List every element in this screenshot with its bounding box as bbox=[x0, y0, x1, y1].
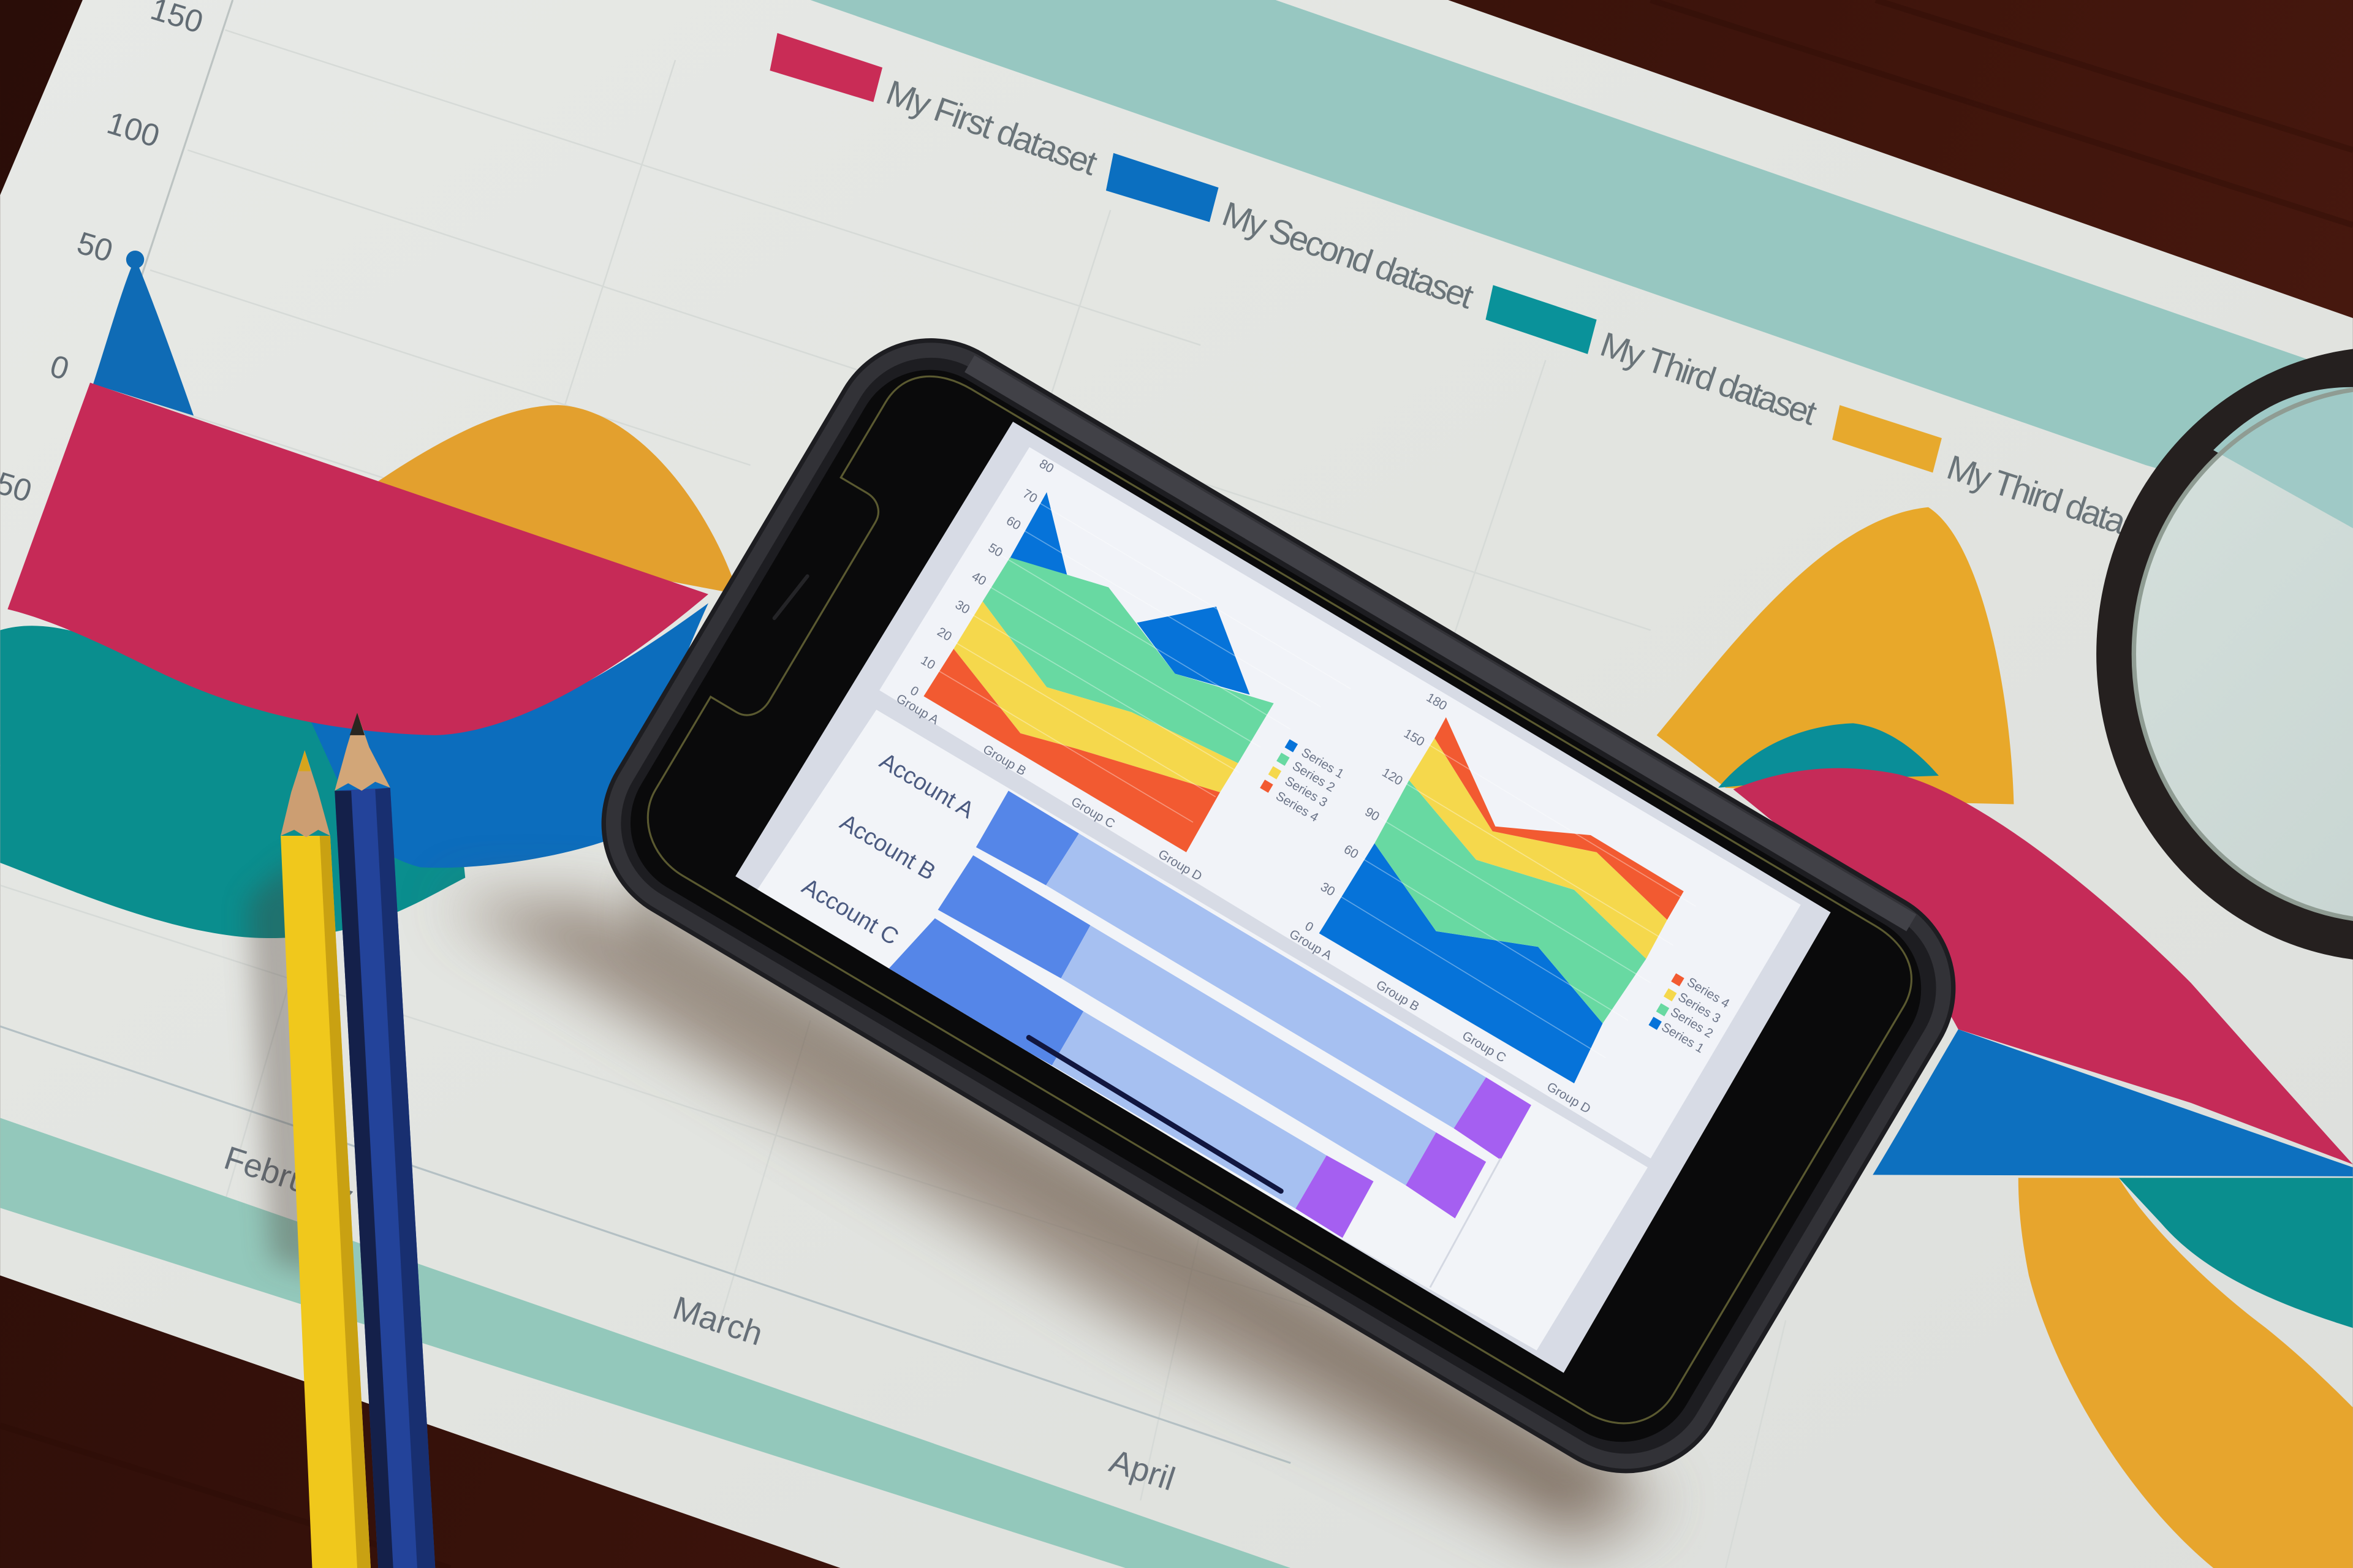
legend: third dataset bbox=[1485, 285, 1822, 433]
chart one: y axis labels: 20 bbox=[934, 624, 954, 644]
magnifier rim bbox=[2096, 347, 2353, 962]
chart one: green area bbox=[983, 558, 1274, 763]
legend: fourth dataset bbox=[1832, 405, 2169, 554]
chart two: x axis labels bbox=[1287, 927, 1593, 1116]
chart one: y axis labels: 60 bbox=[1004, 513, 1023, 533]
right chart: blue area bbox=[1873, 1029, 2353, 1176]
chart two: yellow area bbox=[1409, 738, 1667, 959]
account B bar bbox=[938, 855, 1486, 1218]
chart one: legend: Series 3 bbox=[1283, 774, 1330, 810]
chart one: blue area bbox=[1010, 492, 1250, 695]
account C bar bbox=[885, 918, 1374, 1238]
chart one: x axis labels: Group C bbox=[1069, 795, 1117, 831]
chart two: green area bbox=[1374, 780, 1646, 1023]
lens edge highlight bbox=[2134, 387, 2353, 922]
account labels: Account A bbox=[875, 748, 979, 824]
phone bbox=[564, 300, 1993, 1511]
chart two: y axis labels: 60 bbox=[1341, 842, 1361, 862]
magnifying glass bbox=[2096, 347, 2353, 962]
chart one: y axis labels: 80 bbox=[1037, 456, 1056, 476]
legend: second dataset: My Second dataset bbox=[1218, 194, 1479, 316]
y axis labels: 0 bbox=[46, 347, 74, 387]
x axis line bbox=[0, 1026, 1290, 1463]
yellow pencil bbox=[281, 750, 371, 1568]
account labels: Account B bbox=[836, 809, 940, 885]
chart two: red area bbox=[1434, 718, 1684, 920]
chart two: blue area bbox=[1319, 843, 1602, 1083]
chart two: y axis labels bbox=[1303, 691, 1449, 935]
left chart: red area bbox=[7, 382, 708, 735]
paper grid lines bbox=[0, 30, 1786, 1568]
chart one: legend: Series 1 bbox=[1299, 745, 1346, 781]
y axis labels: 50 bbox=[73, 224, 117, 269]
legend: second dataset bbox=[1106, 153, 1479, 316]
chart one: x axis labels bbox=[894, 691, 1204, 884]
chart one: x axis labels: Group A bbox=[894, 691, 941, 727]
phone contact shadow bbox=[631, 870, 1635, 1508]
chart two: y axis labels: 0 bbox=[1303, 919, 1316, 935]
case rim shading bbox=[580, 317, 1977, 1494]
pencil shadow bbox=[248, 855, 323, 1275]
bottom teal band bbox=[0, 1118, 1290, 1568]
legend: first dataset: My First dataset bbox=[881, 72, 1102, 183]
case top highlight bbox=[969, 364, 1911, 923]
left chart: teal area bbox=[0, 626, 465, 938]
divider line bbox=[1430, 1158, 1501, 1287]
chart two: legend: Series 1 bbox=[1659, 1020, 1707, 1056]
bottom bars panel bbox=[751, 710, 1648, 1350]
month labels bbox=[220, 1140, 1180, 1498]
chart two: grid lines bbox=[1330, 738, 1696, 1058]
y axis line bbox=[142, 0, 234, 276]
chart one: x axis labels: Group B bbox=[980, 742, 1028, 779]
chart two: legend: Series 3 bbox=[1675, 990, 1723, 1026]
legend: first dataset bbox=[770, 33, 1102, 183]
glass front bbox=[603, 342, 1949, 1470]
account labels: Account C bbox=[797, 874, 903, 950]
teal band in lens bbox=[2213, 387, 2353, 528]
y axis labels: 100 bbox=[103, 105, 164, 154]
chart one: y axis labels: 30 bbox=[953, 597, 972, 617]
chart two: x axis labels: Group B bbox=[1374, 978, 1422, 1014]
legend: third dataset: My Third dataset bbox=[1596, 325, 1822, 433]
chart two: y axis labels: 180 bbox=[1424, 691, 1449, 713]
account A bar bbox=[976, 791, 1531, 1160]
right chart: teal lower area bbox=[2119, 1178, 2353, 1328]
chart one: red area bbox=[923, 649, 1220, 852]
right chart: orange lower area bbox=[2018, 1178, 2353, 1568]
right chart: teal hump bbox=[1718, 723, 1939, 788]
chart two: y axis labels: 120 bbox=[1379, 765, 1405, 789]
right chart: orange peak bbox=[1657, 507, 2014, 805]
legend: fourth dataset: My Third dataset bbox=[1942, 447, 2169, 554]
chart one: x axis labels: Group D bbox=[1156, 847, 1204, 884]
chart two: legend bbox=[1648, 973, 1732, 1056]
chart two: x axis labels: Group C bbox=[1460, 1029, 1509, 1066]
chart one: yellow area bbox=[953, 601, 1238, 792]
chart one: y axis labels: 40 bbox=[969, 569, 988, 588]
chart one: y axis labels: 70 bbox=[1020, 487, 1040, 506]
top charts panel bbox=[879, 447, 1801, 1158]
chart one: y axis labels: 10 bbox=[919, 653, 938, 672]
chart two: legend: Series 4 bbox=[1684, 975, 1732, 1011]
chart two: x axis labels: Group D bbox=[1544, 1080, 1593, 1116]
chart two: y axis labels: 150 bbox=[1401, 726, 1427, 749]
chart two: y axis labels: 30 bbox=[1318, 880, 1338, 899]
y axis labels bbox=[0, 0, 207, 509]
chart one: y axis labels: 50 bbox=[986, 540, 1005, 560]
chart two: legend: Series 2 bbox=[1668, 1005, 1715, 1041]
chart two: y axis labels: 90 bbox=[1362, 805, 1382, 824]
right chart: red area bbox=[1733, 768, 2353, 1164]
left chart: orange area bbox=[375, 405, 738, 594]
account labels bbox=[797, 748, 979, 950]
month labels: February bbox=[220, 1140, 357, 1215]
chart one: legend: Series 4 bbox=[1273, 789, 1320, 825]
phone case bbox=[564, 300, 1993, 1511]
home indicator bbox=[1029, 1037, 1281, 1191]
magnifier lens bbox=[2134, 387, 2353, 922]
month labels: April bbox=[1105, 1442, 1180, 1498]
chart one: y axis labels: 0 bbox=[907, 683, 921, 699]
chart one: legend: Series 2 bbox=[1290, 759, 1337, 795]
chart two: x axis labels: Group A bbox=[1287, 927, 1335, 963]
screen background bbox=[735, 422, 1831, 1373]
left chart: blue peak bbox=[93, 251, 194, 415]
chart one: y axis labels bbox=[907, 456, 1056, 699]
glass protector outline with notch bbox=[625, 355, 1931, 1445]
left chart: blue area bbox=[308, 603, 708, 868]
month labels: March bbox=[669, 1289, 767, 1353]
chart one: legend bbox=[1260, 739, 1346, 825]
phone cast shadow bbox=[443, 900, 1665, 1553]
screen bbox=[735, 422, 1831, 1373]
top teal band bbox=[810, 0, 2306, 468]
blue pencil bbox=[335, 713, 435, 1568]
chart one: grid lines bbox=[926, 495, 1351, 822]
speaker slit bbox=[775, 576, 808, 618]
